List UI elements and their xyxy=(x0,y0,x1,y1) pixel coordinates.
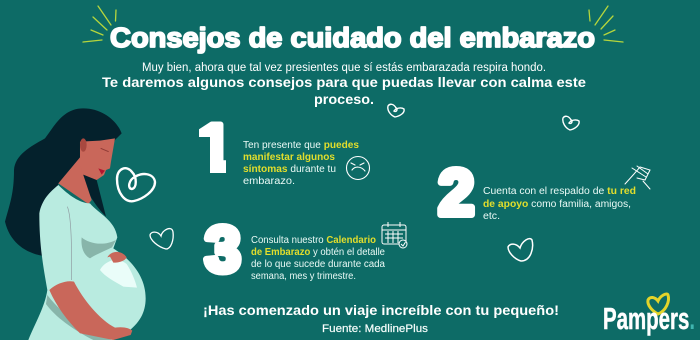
number 2: 2 xyxy=(438,156,474,228)
closed eye xyxy=(101,148,109,152)
intro bold text xyxy=(102,74,586,107)
text: tip 3: de Embarazo y obtén el detalle xyxy=(251,247,385,258)
logo: Pampers xyxy=(603,294,695,336)
text: tip 3: Consulta nuestro Calendario xyxy=(251,235,376,246)
icon: heart near proceso xyxy=(388,104,404,117)
lower arm xyxy=(49,281,132,340)
text: tip 3 xyxy=(251,235,385,282)
waist band xyxy=(46,295,112,340)
closing message: ¡Has comenzado un viaje increíble con tu pequeño! xyxy=(203,302,559,318)
text: tip 1: síntomas durante tu xyxy=(243,164,336,175)
text: tip 2: de apoyo como familia, amigos, xyxy=(483,199,631,210)
text: tip 2 xyxy=(483,186,636,222)
lips xyxy=(98,168,105,175)
text: tip 1: manifestar algunos xyxy=(243,152,335,163)
illustration: pregnant woman xyxy=(5,108,146,340)
title: Consejos de cuidado del embarazo xyxy=(110,22,595,53)
icon: left title sparkles xyxy=(83,6,116,42)
sleeve seam xyxy=(67,207,72,280)
text: tip 2: Cuenta con el respaldo de tu red xyxy=(483,186,636,197)
face xyxy=(80,138,115,180)
source: Fuente: MedlinePlus xyxy=(322,323,429,335)
number 1: 1 xyxy=(196,110,233,184)
hair xyxy=(5,108,122,256)
dress xyxy=(28,185,146,340)
text: tip 2: etc. xyxy=(483,211,500,222)
intro bold text: proceso. xyxy=(314,91,374,107)
icon: sad face xyxy=(346,156,370,180)
text: tip 1: Ten presente que puedes xyxy=(243,140,359,151)
text: tip 1 xyxy=(243,140,359,187)
intro sentence: Muy bien, ahora que tal vez presientes que sí estás embarazada respira hondo. xyxy=(142,62,546,74)
neck and chest xyxy=(58,153,92,204)
belly highlight xyxy=(100,260,137,288)
ear xyxy=(80,138,87,152)
icon: small heart left xyxy=(150,229,173,249)
number 3: 3 xyxy=(205,214,241,286)
intro bold text: Te daremos algunos consejos para que puedas llevar con calma este xyxy=(102,74,586,90)
upper hand xyxy=(107,252,127,263)
logo heart xyxy=(648,294,669,314)
text: tip 3: semana, mes y trimestre. xyxy=(251,271,356,282)
bust shadow xyxy=(81,237,116,258)
icon: large heart xyxy=(117,168,155,201)
icon: heart top right xyxy=(563,116,579,130)
icon: heart lower right xyxy=(508,239,533,261)
icon: calendar xyxy=(382,222,407,248)
icon: support hands xyxy=(625,166,650,189)
text: tip 3: de lo que sucede durante cada xyxy=(251,259,385,270)
text: tip 1: embarazo. xyxy=(243,176,295,187)
icon: right title sparkles xyxy=(589,6,623,42)
